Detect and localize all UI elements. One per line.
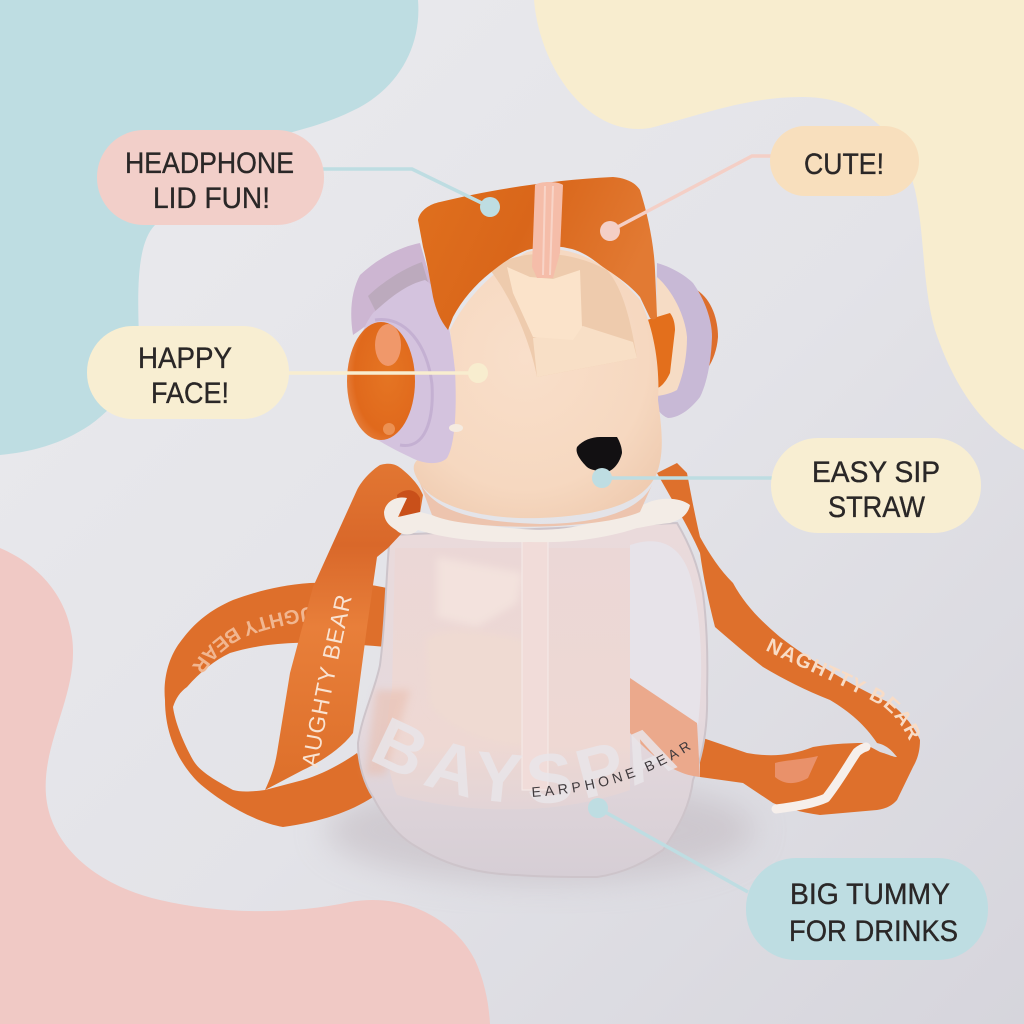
callout: cute: [770, 126, 919, 196]
line: headphone: [322, 169, 490, 207]
strap: front left: [265, 464, 423, 790]
callout: big tummy for drinks: [746, 858, 988, 960]
line: tummy: [598, 808, 748, 892]
spout: [507, 267, 582, 340]
blob: blue top-left: [0, 0, 418, 455]
dot: happy: [468, 363, 488, 383]
strap: back left loop: [164, 582, 386, 827]
brand text: BAYSPA: [372, 718, 678, 804]
straw: [532, 182, 563, 278]
right ear cup: [647, 263, 718, 418]
neck ring: [418, 478, 652, 527]
callout: big tummy for drinks: BIG TUMMY: [790, 878, 950, 911]
inner bear shape: [425, 631, 525, 745]
inner tint: [387, 548, 630, 809]
collar: [384, 498, 690, 542]
callout: easy sip straw: STRAW: [828, 491, 926, 524]
bear head: [414, 249, 662, 518]
callout: happy face: HAPPY: [138, 342, 232, 375]
dot: headphone: [480, 197, 500, 217]
blob: pink bottom-left: [0, 548, 490, 1024]
bottle body: [357, 522, 708, 878]
head cut-out: [490, 254, 637, 377]
callout: easy sip straw: [771, 438, 981, 533]
right lobe: [630, 541, 701, 725]
headband: [351, 243, 432, 335]
strap seen through jar: [630, 678, 700, 777]
line: cute: [610, 156, 772, 231]
brand subtext: EARPHONE BEAR: [532, 742, 691, 797]
nose: [577, 437, 622, 472]
straw inside: [522, 540, 548, 790]
strap text: right: NAGHTTY BEAR: [766, 638, 920, 741]
strap text: back: NAUGHTY BEAR: [192, 607, 308, 672]
white strap clip: [776, 747, 866, 809]
step block: [533, 326, 637, 377]
callout: happy face: FACE!: [151, 377, 229, 410]
strap seen through jar, left: [365, 690, 410, 775]
strap: lower band gap: [775, 756, 818, 783]
strap: right: [657, 463, 920, 815]
dot: tummy: [588, 798, 608, 818]
left ear cup: [347, 280, 463, 463]
dot: sip: [592, 468, 612, 488]
callout: cute: CUTE!: [804, 148, 884, 181]
callout: big tummy for drinks: FOR DRINKS: [789, 915, 958, 948]
callout: headphone lid fun: LID FUN!: [153, 182, 270, 215]
bottle shadow: [325, 778, 755, 882]
callout: easy sip straw: EASY SIP: [812, 456, 940, 489]
callout: happy face: [87, 326, 289, 419]
dot: cute: [600, 221, 620, 241]
line: happy: [288, 371, 478, 375]
callout: headphone lid fun: HEADPHONE: [125, 147, 294, 180]
headphone lid: [418, 177, 657, 330]
inner highlight: [437, 557, 523, 627]
headband hollow: [368, 262, 428, 312]
blob: yellow top-right: [534, 0, 1024, 450]
callout: headphone lid fun: [97, 130, 324, 225]
line: sip: [602, 476, 772, 480]
strap inner fold: [397, 490, 420, 518]
